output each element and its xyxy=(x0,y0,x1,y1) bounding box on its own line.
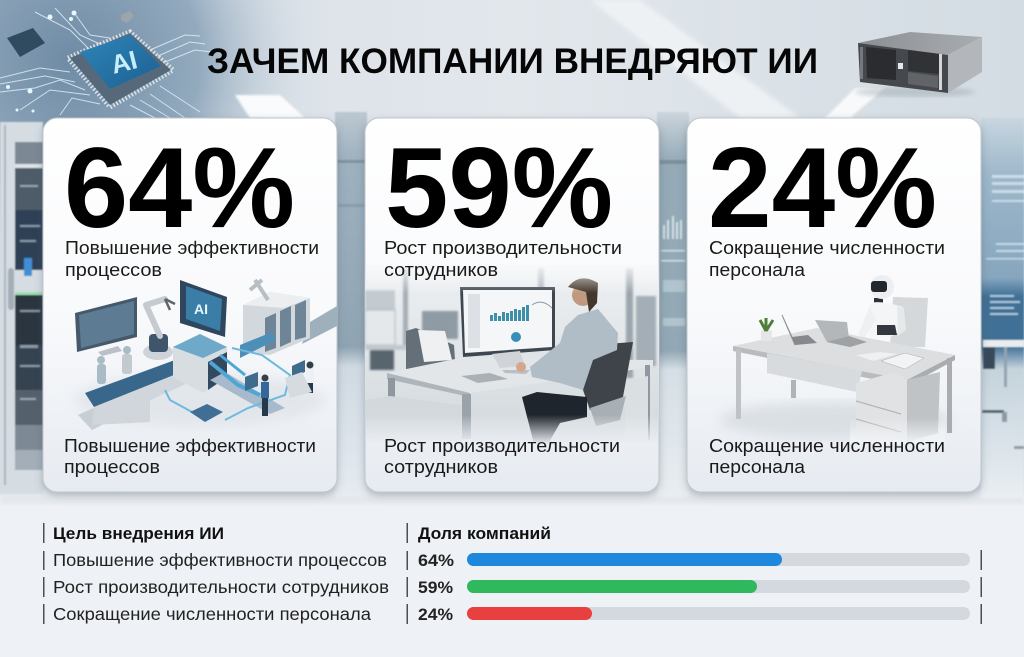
row: headcount reduction: 24% xyxy=(418,605,453,624)
lower caption: Рост производительности xyxy=(384,436,620,456)
icon: AI chip with circuit traces: AI xyxy=(108,44,140,80)
AI screen xyxy=(180,280,227,337)
left monitor xyxy=(75,297,137,352)
title: ЗАЧЕМ КОМПАНИИ ВНЕДРЯЮТ ИИ xyxy=(207,42,818,81)
row: process efficiency xyxy=(53,550,970,570)
upper caption: Рост производительности xyxy=(384,238,622,258)
upper caption: Сокращение численности xyxy=(709,238,945,258)
row: headcount reduction: Сокращение численности персонала xyxy=(53,604,371,624)
header: goal: Цель внедрения ИИ xyxy=(53,524,224,543)
upper caption: персонала xyxy=(709,260,806,280)
table: goals and share of companies xyxy=(43,523,982,624)
upper caption: Повышение эффективности xyxy=(65,238,319,258)
column separators xyxy=(43,523,982,624)
row: employee productivity xyxy=(53,577,970,597)
lower caption: Повышение эффективности xyxy=(64,436,316,456)
stat: 24%: 24% xyxy=(708,125,937,252)
panel: employee productivity xyxy=(365,118,659,492)
upper caption: сотрудников xyxy=(384,260,498,280)
robot arm xyxy=(143,299,175,360)
lower caption: процессов xyxy=(64,457,160,477)
decorative right office background xyxy=(981,118,1024,498)
chip node xyxy=(190,404,223,422)
header: share: Доля компаний xyxy=(418,524,551,543)
stat: 64%: 64% xyxy=(64,125,295,252)
laptops xyxy=(782,315,795,345)
row: process efficiency: 64% xyxy=(418,551,454,570)
icon: AI chip with circuit traces xyxy=(0,8,212,118)
drawer unit xyxy=(856,372,907,442)
plant xyxy=(760,318,773,341)
man xyxy=(516,278,618,444)
illustration: man at office desk xyxy=(365,262,659,444)
illustration: robot at empty desk xyxy=(720,275,955,444)
desk top xyxy=(733,328,955,380)
keyboard and notebook xyxy=(502,370,530,374)
chair xyxy=(583,342,633,410)
robots at conveyor xyxy=(97,346,132,384)
file holder xyxy=(406,328,455,370)
lower caption: персонала xyxy=(709,457,806,477)
row: headcount reduction xyxy=(53,604,970,624)
workers xyxy=(245,360,314,416)
robot xyxy=(858,275,906,338)
decorative left server rack xyxy=(0,122,43,494)
icon: rack server xyxy=(855,32,982,97)
row: employee productivity: 59% xyxy=(418,578,453,597)
illustration: automated factory line xyxy=(75,280,337,430)
papers xyxy=(856,352,897,361)
row: employee productivity: Рост производительности сотрудников xyxy=(53,577,389,597)
panel: headcount reduction xyxy=(687,118,981,492)
upper caption: процессов xyxy=(65,260,162,280)
desk xyxy=(387,358,653,393)
monitor xyxy=(460,287,555,357)
chair xyxy=(890,297,928,347)
decorative gutter between cards xyxy=(335,112,689,497)
conveyor left xyxy=(85,353,204,407)
illustration: automated factory line: AI xyxy=(194,301,208,317)
row: process efficiency: Повышение эффективности процессов xyxy=(53,550,387,570)
lower caption: сотрудников xyxy=(384,457,498,477)
lower caption: Сокращение численности xyxy=(709,436,945,456)
central unit xyxy=(173,334,227,393)
conveyor right with pipes xyxy=(210,372,285,414)
server racks xyxy=(243,292,310,355)
stat: 59%: 59% xyxy=(385,125,613,252)
panel: process efficiency xyxy=(43,118,337,492)
